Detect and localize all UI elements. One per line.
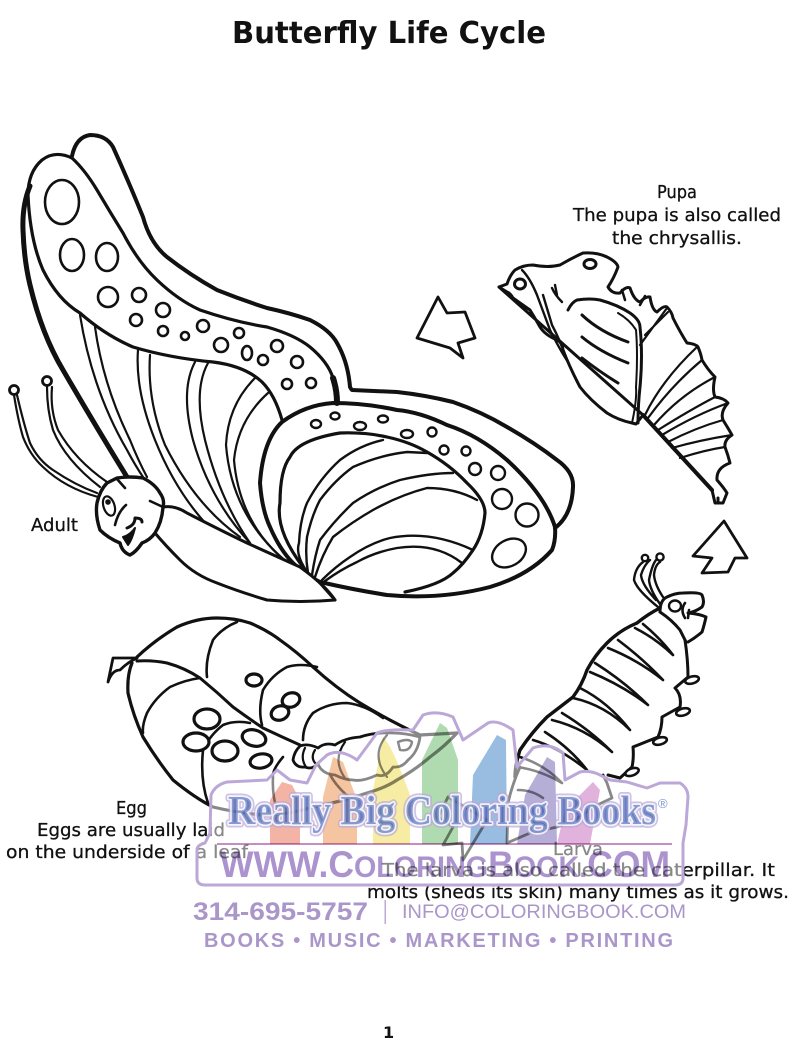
registered mark: ® [658,796,668,811]
crayons [270,723,600,844]
illustration: adult butterfly [10,135,573,602]
logo wordmark: Really Big Coloring Books [228,787,656,833]
antennae [10,376,107,497]
text block: pupa: Pupa [657,182,697,203]
contact line: BOOKS • MUSIC • MARKETING • PRINTING [204,930,673,952]
upper wing spots [45,180,316,389]
text block: egg: Egg [116,798,147,819]
text block: pupa [572,182,781,249]
label: Adult: Adult [31,515,78,536]
lower wing [260,403,555,596]
logo divider [217,843,672,845]
arrow: adult from pupa [417,297,475,358]
contact line: 314-695-5757 [193,898,368,926]
arrow: adult-to-egg [438,797,487,860]
leaf outline [128,618,457,815]
title: Butterfly Life Cycle [232,16,546,51]
logo backing [197,713,688,885]
illustration: pupa [499,253,732,503]
text block: egg: Eggs are usually laid [37,820,225,841]
illustration: larva [515,553,706,798]
eggs [183,674,302,770]
logo wordmark white edge: Really Big Coloring Books [228,787,656,833]
text block: larva: The larva is also called the caterpillar. It [381,860,775,881]
text block: pupa: The pupa is also called [572,205,781,226]
text block: larva: Larva [553,839,603,860]
small caterpillar on leaf [293,733,420,780]
text block: egg [6,798,249,863]
lower wing spots [311,412,538,573]
watermark logo [197,713,688,885]
upper wing ribs [80,315,297,570]
text block: larva [367,839,789,903]
logo wordmark halo: Really Big Coloring Books [228,787,656,833]
page number: 1 [383,1023,394,1042]
arrow: pupa from larva [693,521,747,573]
text block: larva: molts (sheds its skin) many times as it grows. [367,882,789,903]
contact line: INFO@COLORINGBOOK.COM [402,902,686,923]
head [96,477,164,555]
text block: egg: on the underside of a leaf [6,842,249,863]
text block: pupa: the chrysallis. [612,228,742,249]
upper wing [23,135,573,570]
larva tail under logo [507,767,612,843]
website: WWW.COLORINGBOOK.COM [220,844,670,885]
body [155,507,335,602]
illustration: leaf with eggs [108,618,457,815]
contact line [193,898,686,952]
